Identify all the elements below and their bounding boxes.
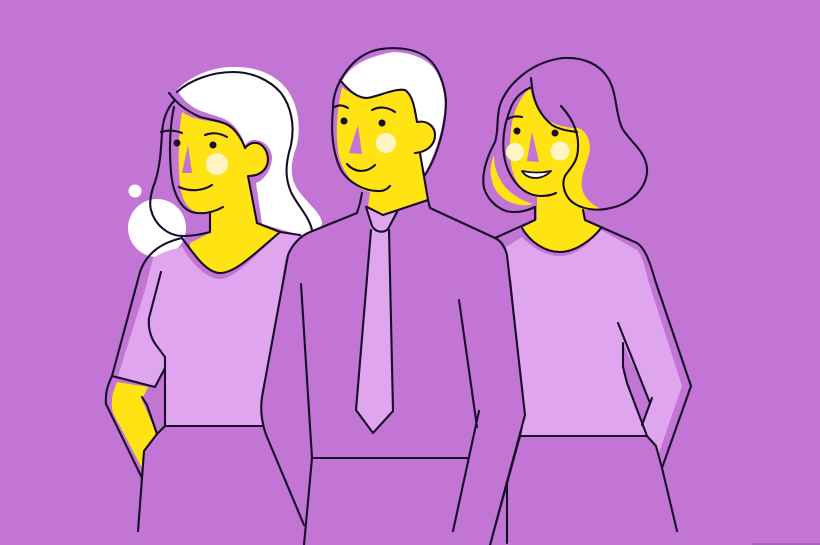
left woman cheek (206, 153, 228, 175)
man eyes (340, 118, 386, 126)
left woman eyes (174, 140, 216, 148)
left woman nose (182, 145, 192, 173)
left woman top (118, 233, 300, 426)
right woman face and neck fill (510, 88, 603, 252)
man cheek (376, 133, 396, 153)
man face and neck fill (337, 87, 435, 215)
man outlines (261, 48, 525, 545)
right woman mouth (522, 171, 551, 178)
right woman hair lock (491, 155, 533, 205)
left woman pocket shade (142, 368, 165, 434)
left woman face and neck fill (179, 112, 280, 273)
left woman outlines (106, 72, 312, 531)
right woman eyes (514, 128, 558, 136)
right woman pocket shade (623, 343, 650, 425)
man hair fill (342, 52, 445, 173)
right woman cheeks (506, 142, 570, 161)
right woman top (505, 230, 682, 453)
decorative bubbles (128, 184, 186, 257)
figure: left woman (106, 67, 322, 531)
left woman hair fill (177, 67, 322, 235)
man tie knot (366, 208, 397, 233)
left woman hand (112, 382, 157, 470)
figure: man (261, 48, 525, 545)
man nose (349, 125, 362, 154)
man body (261, 200, 525, 545)
figure: right woman (483, 58, 691, 545)
right woman outlines (483, 58, 691, 545)
right woman nose (527, 132, 539, 162)
man tie (356, 230, 393, 433)
